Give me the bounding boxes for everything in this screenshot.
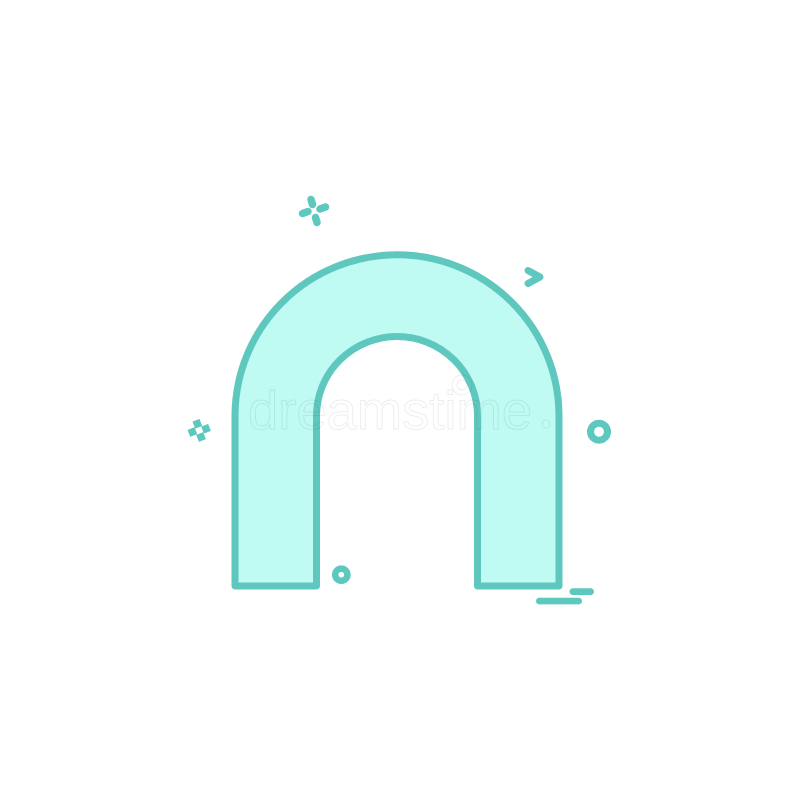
icon: large ring xyxy=(590,423,608,440)
icon: small square sparkle xyxy=(187,419,211,442)
icon: dash lines xyxy=(536,588,594,604)
icon: small ring xyxy=(335,569,347,581)
watermark: dreamstime xyxy=(248,381,532,441)
icon: four-petal sparkle xyxy=(302,200,326,222)
icon: chevron xyxy=(528,270,540,284)
icon: arch shape xyxy=(235,255,559,586)
